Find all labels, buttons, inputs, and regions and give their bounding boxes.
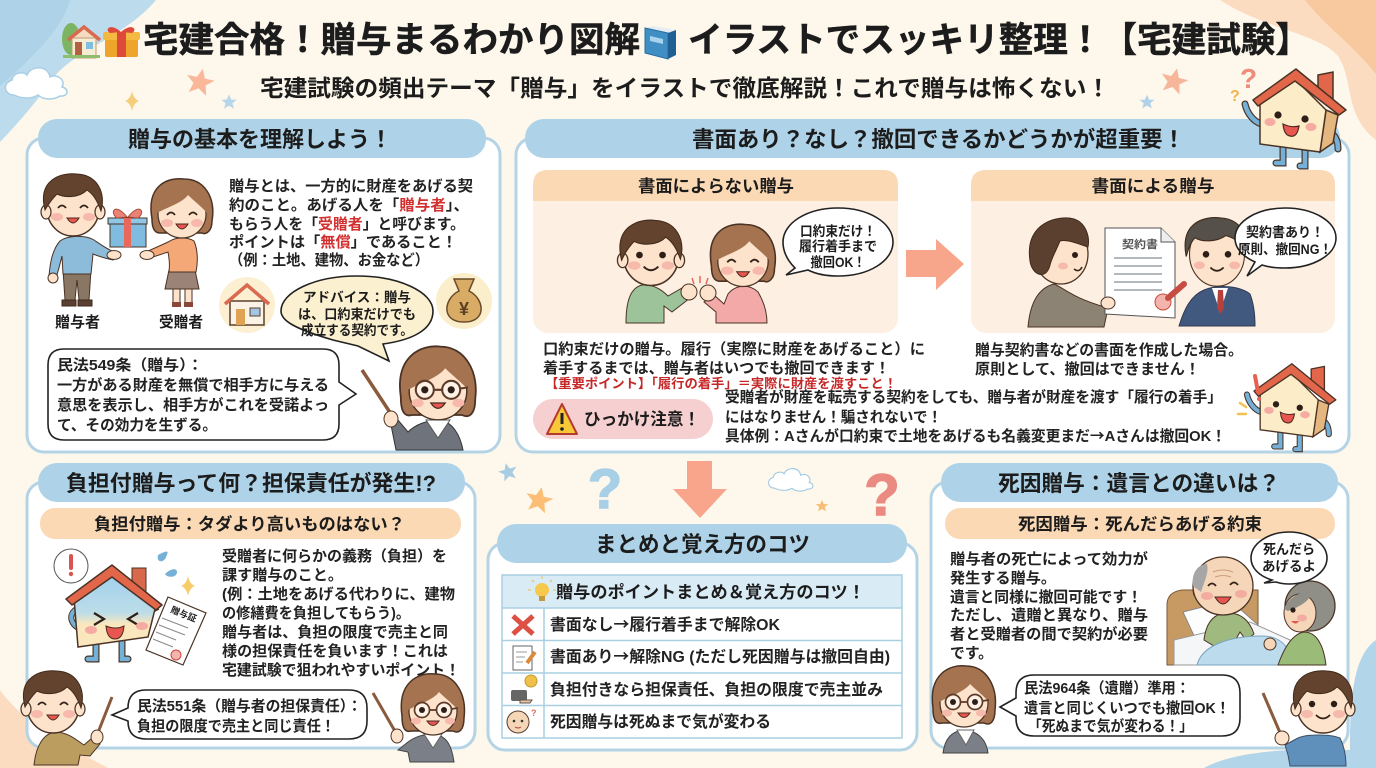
illustration: two people pinky promise bbox=[617, 220, 775, 323]
callout: oral promise only: 履行着手まで bbox=[799, 238, 877, 254]
icon: light bulb bbox=[528, 576, 556, 601]
sub-panel: written gift: 書面による贈与 bbox=[1092, 176, 1214, 196]
text block: definition: ポイントは「無償」であること！ bbox=[229, 234, 457, 251]
heading: summary: まとめと覚え方のコツ bbox=[595, 532, 810, 557]
icon: old man face: ? bbox=[531, 708, 536, 718]
summary table bbox=[502, 575, 902, 738]
text block: burdened gift explanation: 贈与者は、負担の限度で売主と同 bbox=[222, 623, 448, 641]
heading: basics: 贈与の基本を理解しよう！ bbox=[128, 127, 392, 152]
illustration: signing contract bbox=[1028, 218, 1255, 327]
key point in red: 【重要ポイント】「履行の着手」＝実際に財産を渡すこと！ bbox=[545, 376, 897, 391]
heading: burdened gift bbox=[38, 463, 465, 502]
subheading: gift on death bbox=[945, 508, 1335, 539]
summary table: 書面なし→履行着手まで解除OK bbox=[550, 611, 780, 635]
text block: definition: 約のこと。あげる人を「 贈与者」、 bbox=[229, 196, 469, 214]
icon: hand and coin bbox=[511, 675, 537, 703]
callout: civil code 549: 民法549条（贈与）： bbox=[57, 356, 203, 374]
text block: definition: もらう人を「受贈者」と呼びます。 bbox=[229, 215, 465, 233]
heading: burdened gift: 負担付贈与って何？担保責任が発生!? bbox=[66, 471, 436, 496]
icon: money bag bbox=[436, 273, 492, 329]
text block: burdened gift explanation: 宅建試験で狙われやすいポイント！ bbox=[222, 661, 460, 679]
panel: basics of gifting bbox=[27, 119, 500, 452]
illustration: boy with pointer bbox=[1263, 671, 1355, 766]
icon: cross bbox=[513, 616, 533, 634]
callout: advice: 成立する契約です。 bbox=[301, 322, 413, 338]
callout: speech of elderly man: あげるよ bbox=[1262, 559, 1316, 574]
panel: burdened gift bbox=[27, 463, 475, 748]
title bbox=[62, 21, 1310, 60]
icon: house bbox=[219, 277, 275, 333]
callout: civil code 549 bbox=[48, 349, 356, 440]
illustration: teacher with pointer bbox=[373, 674, 464, 762]
callout: civil code 549: 意思を表示し、相手方がこれを受諾よっ bbox=[57, 396, 329, 414]
text block: trap explanation bbox=[725, 388, 1226, 446]
text block: oral gift explanation: 口約束だけの贈与。履行（実際に財産をあげること）に bbox=[543, 340, 925, 358]
text block: oral gift explanation: 着手するまでは、贈与者はいつでも撤回できます！ bbox=[543, 359, 890, 377]
text block: gift on death explanation: 発生する贈与。 bbox=[950, 569, 1056, 587]
icon: document and pen bbox=[513, 646, 535, 670]
warning badge: ひっかけ注意！ bbox=[584, 410, 700, 429]
callout: civil code 964: 「死ぬまで気が変わる！」 bbox=[1028, 717, 1193, 735]
sub-panel: written gift bbox=[971, 170, 1336, 333]
illustration: boy with pointer bbox=[21, 671, 112, 765]
warning badge bbox=[533, 399, 713, 439]
illustration: top right house character: ? bbox=[1240, 63, 1257, 94]
text block: gift on death explanation: 遺言と同様に撤回可能です！ bbox=[950, 588, 1142, 606]
callout: advice: アドバイス：贈与 bbox=[303, 289, 411, 305]
text block: gift on death explanation: です。 bbox=[950, 645, 993, 662]
text block: burdened gift explanation bbox=[222, 547, 460, 679]
text block: burdened gift explanation: 受贈者に何らかの義務（負担）を bbox=[222, 547, 447, 565]
illustration: worried house with contract bbox=[54, 549, 206, 665]
callout: civil code 551: 負担の限度で売主と同じ責任！ bbox=[137, 717, 335, 735]
text block: burdened gift explanation: (例：土地をあげる代わりに、建物 bbox=[222, 585, 455, 603]
callout: oral promise only: 撤回OK！ bbox=[810, 254, 866, 270]
text block: trap explanation: にはなりません！騙されないで！ bbox=[725, 409, 942, 426]
arrow: to written gift bbox=[906, 239, 964, 290]
heading: gift on death bbox=[941, 463, 1338, 502]
text block: burdened gift explanation: の修繕費を負担してもらう)。 bbox=[222, 604, 410, 622]
callout: advice: は、口約束だけでも bbox=[298, 306, 416, 322]
heading: revocation bbox=[525, 119, 1340, 158]
text block: definition bbox=[229, 177, 473, 269]
sub-panel: oral gift bbox=[533, 170, 898, 333]
text block: trap explanation: 具体例：Aさんが口約束で土地をあげるも名義変更まだ→Aさんは撤回OK！ bbox=[725, 425, 1226, 446]
text block: burdened gift explanation: 様の担保責任を負います！これは bbox=[222, 642, 448, 660]
summary table: 負担付きなら担保責任、負担の限度で売主並み bbox=[550, 680, 883, 699]
label: receiver: 受贈者 bbox=[159, 313, 203, 331]
title: 宅建合格！贈与まるわかり図解 bbox=[143, 21, 640, 60]
text block: gift on death explanation: 贈与者の死亡によって効力が bbox=[950, 550, 1148, 568]
illustration: teacher with pointer bbox=[362, 346, 476, 450]
illustration: receiver bbox=[140, 179, 213, 307]
illustration: worried house with contract: 贈与証 bbox=[169, 604, 198, 624]
illustration: teacher bbox=[932, 666, 995, 753]
label: giver: 贈与者 bbox=[55, 313, 100, 331]
text block: written gift explanation: 原則として、撤回はできません！ bbox=[975, 360, 1200, 378]
subheading: gift on death: 死因贈与：死んだらあげる約束 bbox=[1018, 514, 1262, 534]
sub-panel: oral gift: 書面によらない贈与 bbox=[638, 176, 794, 196]
callout: speech of elderly man bbox=[1251, 532, 1327, 584]
subheading: burdened gift: 負担付贈与：タダより高いものはない？ bbox=[94, 514, 405, 534]
illustration: signing contract: 契約書 bbox=[1122, 237, 1158, 251]
callout: contract exists: 原則、撤回NG！ bbox=[1238, 241, 1332, 257]
callout: advice bbox=[281, 276, 433, 361]
arrow: down to summary bbox=[673, 461, 727, 518]
title: イラストでスッキリ整理！【宅建試験】 bbox=[688, 21, 1310, 60]
icon: old man face bbox=[507, 708, 536, 733]
icon: house bbox=[62, 23, 100, 58]
text block: oral gift explanation bbox=[543, 340, 925, 377]
heading: basics bbox=[38, 119, 486, 158]
panel: gift on death bbox=[931, 463, 1348, 748]
callout: civil code 551 bbox=[112, 690, 367, 739]
icon: warning triangle bbox=[547, 404, 577, 434]
illustration: top right house character: ? bbox=[1230, 88, 1240, 105]
text block: gift on death explanation: 者と受贈者の間で契約が必要 bbox=[950, 625, 1148, 643]
text block: definition: （例：土地、建物、お金など） bbox=[229, 251, 429, 269]
icon: money bag: ¥ bbox=[459, 299, 469, 319]
callout: civil code 964: 遺言と同じくいつでも撤回OK！ bbox=[1024, 699, 1230, 717]
summary table: 贈与のポイントまとめ＆覚え方のコツ！ bbox=[556, 582, 865, 602]
illustration: house character with exclamation bbox=[1238, 364, 1336, 449]
subtitle: 宅建試験の頻出テーマ「贈与」をイラストで徹底解説！これで贈与は怖くない！ bbox=[260, 75, 1110, 101]
panel: written or not bbox=[516, 119, 1349, 452]
illustration: top right house character bbox=[1230, 63, 1346, 166]
summary table: 死因贈与は死ぬまで気が変わる bbox=[550, 712, 771, 731]
text block: definition: 贈与とは、一方的に財産をあげる契 bbox=[229, 177, 473, 195]
illustration: giver bbox=[41, 174, 121, 306]
callout: civil code 964: 民法964条（遺贈）準用： bbox=[1024, 679, 1190, 697]
callout: contract exists bbox=[1235, 208, 1336, 276]
text block: trap explanation: 受贈者が財産を転売する契約をしても、贈与者が財産を渡す「履行の着手」 bbox=[725, 388, 1222, 406]
text block: gift on death explanation bbox=[950, 550, 1148, 662]
heading: gift on death: 死因贈与：遺言との違いは？ bbox=[998, 471, 1280, 496]
callout: civil code 551: 民法551条（贈与者の担保責任）： bbox=[137, 697, 362, 715]
text block: gift on death explanation: ただし、遺贈と異なり、贈与 bbox=[950, 606, 1148, 624]
text block: written gift explanation: 贈与契約書などの書面を作成した場合。 bbox=[975, 341, 1243, 359]
callout: oral promise only bbox=[783, 208, 893, 276]
icon: blue question mark: ? bbox=[588, 457, 622, 520]
summary table: 書面あり→解除NG (ただし死因贈与は撤回自由) bbox=[550, 643, 890, 667]
callout: civil code 964 bbox=[1000, 675, 1240, 736]
icon: red question mark: ? bbox=[864, 463, 900, 528]
icon: gift box bbox=[103, 27, 140, 57]
callout: oral promise only: 口約束だけ！ bbox=[800, 223, 876, 239]
heading: summary bbox=[497, 524, 907, 563]
panel: summary bbox=[488, 524, 917, 750]
callout: civil code 549: 一方がある財産を無償で相手方に与える bbox=[57, 376, 329, 394]
callout: civil code 549: て、その効力を生ずる。 bbox=[57, 417, 217, 434]
heading: revocation: 書面あり？なし？撤回できるかどうかが超重要！ bbox=[692, 127, 1185, 152]
illustration: elderly man in bed with visitor bbox=[1167, 557, 1335, 665]
text block: written gift explanation bbox=[975, 341, 1243, 378]
illustration: gift bbox=[108, 209, 147, 247]
text block: burdened gift explanation: 課す贈与のこと。 bbox=[222, 566, 343, 584]
callout: contract exists: 契約書あり！ bbox=[1246, 224, 1324, 240]
icon: blue book bbox=[645, 26, 676, 59]
callout: speech of elderly man: 死んだら bbox=[1263, 542, 1315, 557]
subheading: burdened gift bbox=[40, 508, 461, 539]
